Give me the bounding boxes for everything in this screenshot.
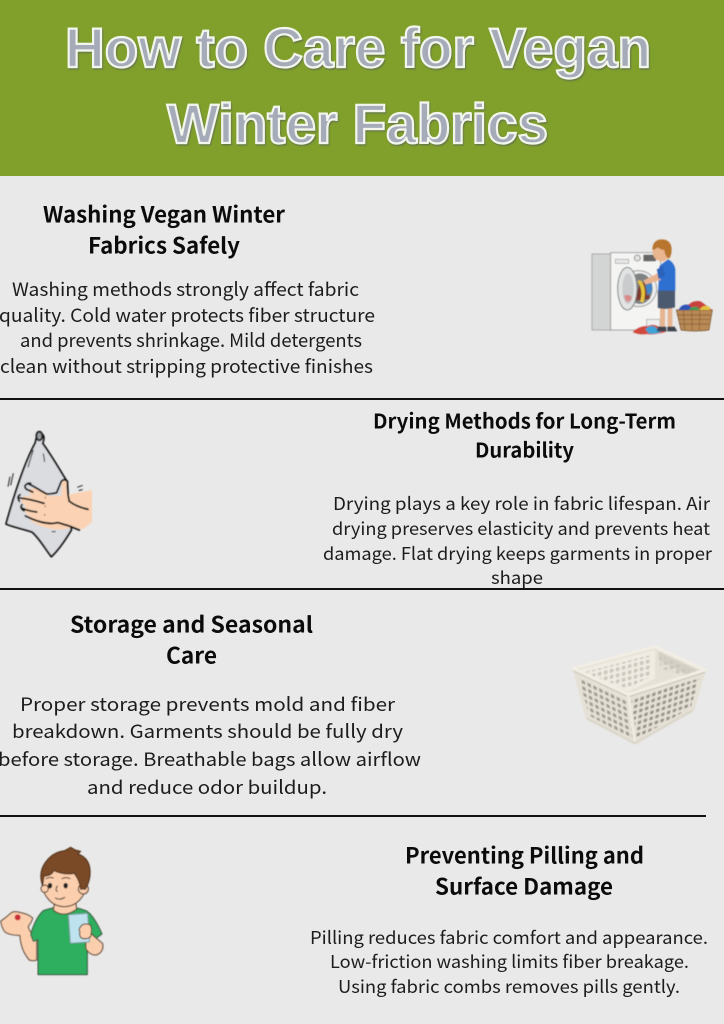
heading: pilling: Surface Damage xyxy=(435,870,613,902)
heading: storage xyxy=(70,608,313,670)
heading: storage: Storage and Seasonal xyxy=(70,608,313,640)
divider line 1 xyxy=(0,398,724,400)
text block: storage: before storage. Breathable bags allow airflow xyxy=(0,746,421,772)
divider line 2 xyxy=(0,588,724,590)
heading: pilling: Preventing Pilling and xyxy=(405,838,644,870)
text block: pilling xyxy=(310,925,708,999)
icon: plastic basket xyxy=(573,647,705,743)
title xyxy=(65,16,651,155)
title: How to Care for Vegan xyxy=(65,16,651,79)
text block: pilling: Using fabric combs removes pills gently. xyxy=(338,974,680,999)
text block: drying: damage. Flat drying keeps garments in proper xyxy=(323,541,712,566)
icon: boy holding pill and water glass xyxy=(1,847,103,975)
icon: hand squeezing cloth xyxy=(6,432,92,557)
text block: drying: Drying plays a key role in fabric lifespan. Air xyxy=(333,491,710,516)
text block: storage: and reduce odor buildup. xyxy=(87,774,327,800)
icon: boy loading washing machine xyxy=(592,239,712,334)
panel: storage xyxy=(0,608,705,800)
text block: storage: breakdown. Garments should be fully dry xyxy=(12,718,403,744)
text block: drying: drying preserves elasticity and prevents heat xyxy=(332,516,710,541)
text block: washing: quality. Cold water protects fiber structure xyxy=(0,302,375,328)
panel: drying xyxy=(6,404,712,590)
text block: washing: Washing methods strongly affect fabric xyxy=(12,276,359,302)
heading: storage: Care xyxy=(166,638,217,670)
heading: drying: Durability xyxy=(475,434,574,464)
text block: pilling: Pilling reduces fabric comfort and appearance. xyxy=(310,925,708,950)
heading: pilling xyxy=(405,838,644,902)
text block: washing: clean without stripping protective finishes xyxy=(0,353,373,379)
text block: washing xyxy=(0,276,375,379)
divider line 3 xyxy=(0,815,706,817)
title: Winter Fabrics xyxy=(167,92,548,155)
text block: drying xyxy=(323,491,712,590)
text block: storage: Proper storage prevents mold and fiber xyxy=(20,691,396,717)
text block: pilling: Low-friction washing limits fiber breakage. xyxy=(330,949,689,974)
text block: drying: shape xyxy=(491,565,543,590)
heading: washing: Washing Vegan Winter xyxy=(43,198,285,230)
text block: washing: and prevents shrinkage. Mild detergents xyxy=(20,327,362,353)
header banner xyxy=(0,0,724,176)
heading: washing xyxy=(43,198,285,260)
heading: drying xyxy=(373,404,676,464)
panel: pilling xyxy=(1,838,708,999)
panel: washing xyxy=(0,198,712,379)
text block: storage xyxy=(0,691,421,800)
heading: washing: Fabrics Safely xyxy=(88,228,240,260)
heading: drying: Drying Methods for Long-Term xyxy=(373,404,676,434)
